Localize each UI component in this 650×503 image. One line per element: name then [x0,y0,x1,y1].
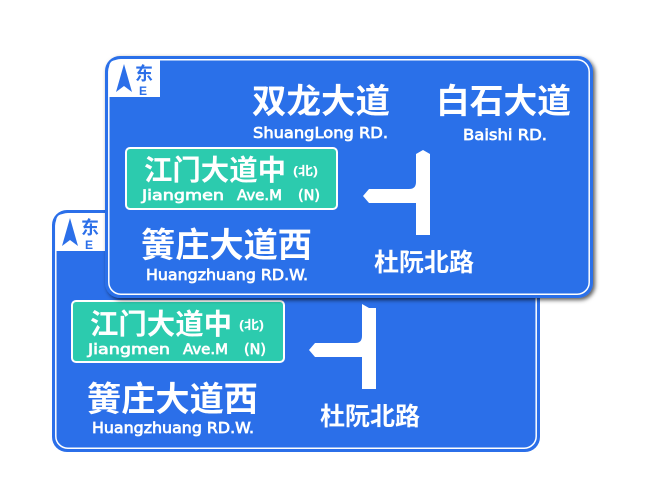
front green direction panel: (北) [293,164,318,178]
back compass box: 东 [81,217,99,238]
back road name: Huangzhuang: 簧庄大道西 [87,381,258,419]
back green direction panel: Jiangmen [87,342,170,358]
road name: Huangzhuang: 簧庄大道西 [141,227,312,265]
road name: ShuangLong: ShuangLong RD. [253,124,388,142]
front green direction panel: (N) [298,188,320,204]
back green direction panel [72,301,284,362]
road name: ShuangLong: 双龙大道 [252,83,390,121]
back green direction panel: 江门大道中 [90,309,232,341]
road name: Huangzhuang [141,227,312,284]
back green direction panel: Ave.M [183,342,228,358]
junction arrow [363,150,430,235]
front compass box: 东 [135,63,153,84]
back road sign [52,210,540,452]
road name: Baishi [436,83,571,144]
back green direction panel: (北) [239,318,264,332]
front green direction panel: Ave.M [237,188,282,204]
back compass box: E [85,238,93,252]
road name: Baishi: 白石大道 [436,83,571,121]
back road name: Duruan North: 杜阮北路 [320,403,420,431]
back green direction panel: (N) [244,342,266,358]
front green direction panel: 江门大道中 [144,155,286,187]
front compass box [109,60,160,98]
front green direction panel: Jiangmen [141,188,224,204]
front compass box: E [139,84,147,98]
road name: Huangzhuang: Huangzhuang RD.W. [146,266,308,284]
road name: ShuangLong [252,83,390,142]
back junction arrow [309,304,376,389]
road name: Baishi: Baishi RD. [463,126,547,144]
back sign panel [52,210,540,452]
front green direction panel [126,148,337,209]
back road name: Huangzhuang: Huangzhuang RD.W. [92,419,254,437]
front sign panel [105,56,593,298]
road name: Duruan North: 杜阮北路 [374,249,474,277]
back road name: Huangzhuang [87,381,258,437]
back compass box [56,214,106,252]
front road sign [105,56,593,298]
